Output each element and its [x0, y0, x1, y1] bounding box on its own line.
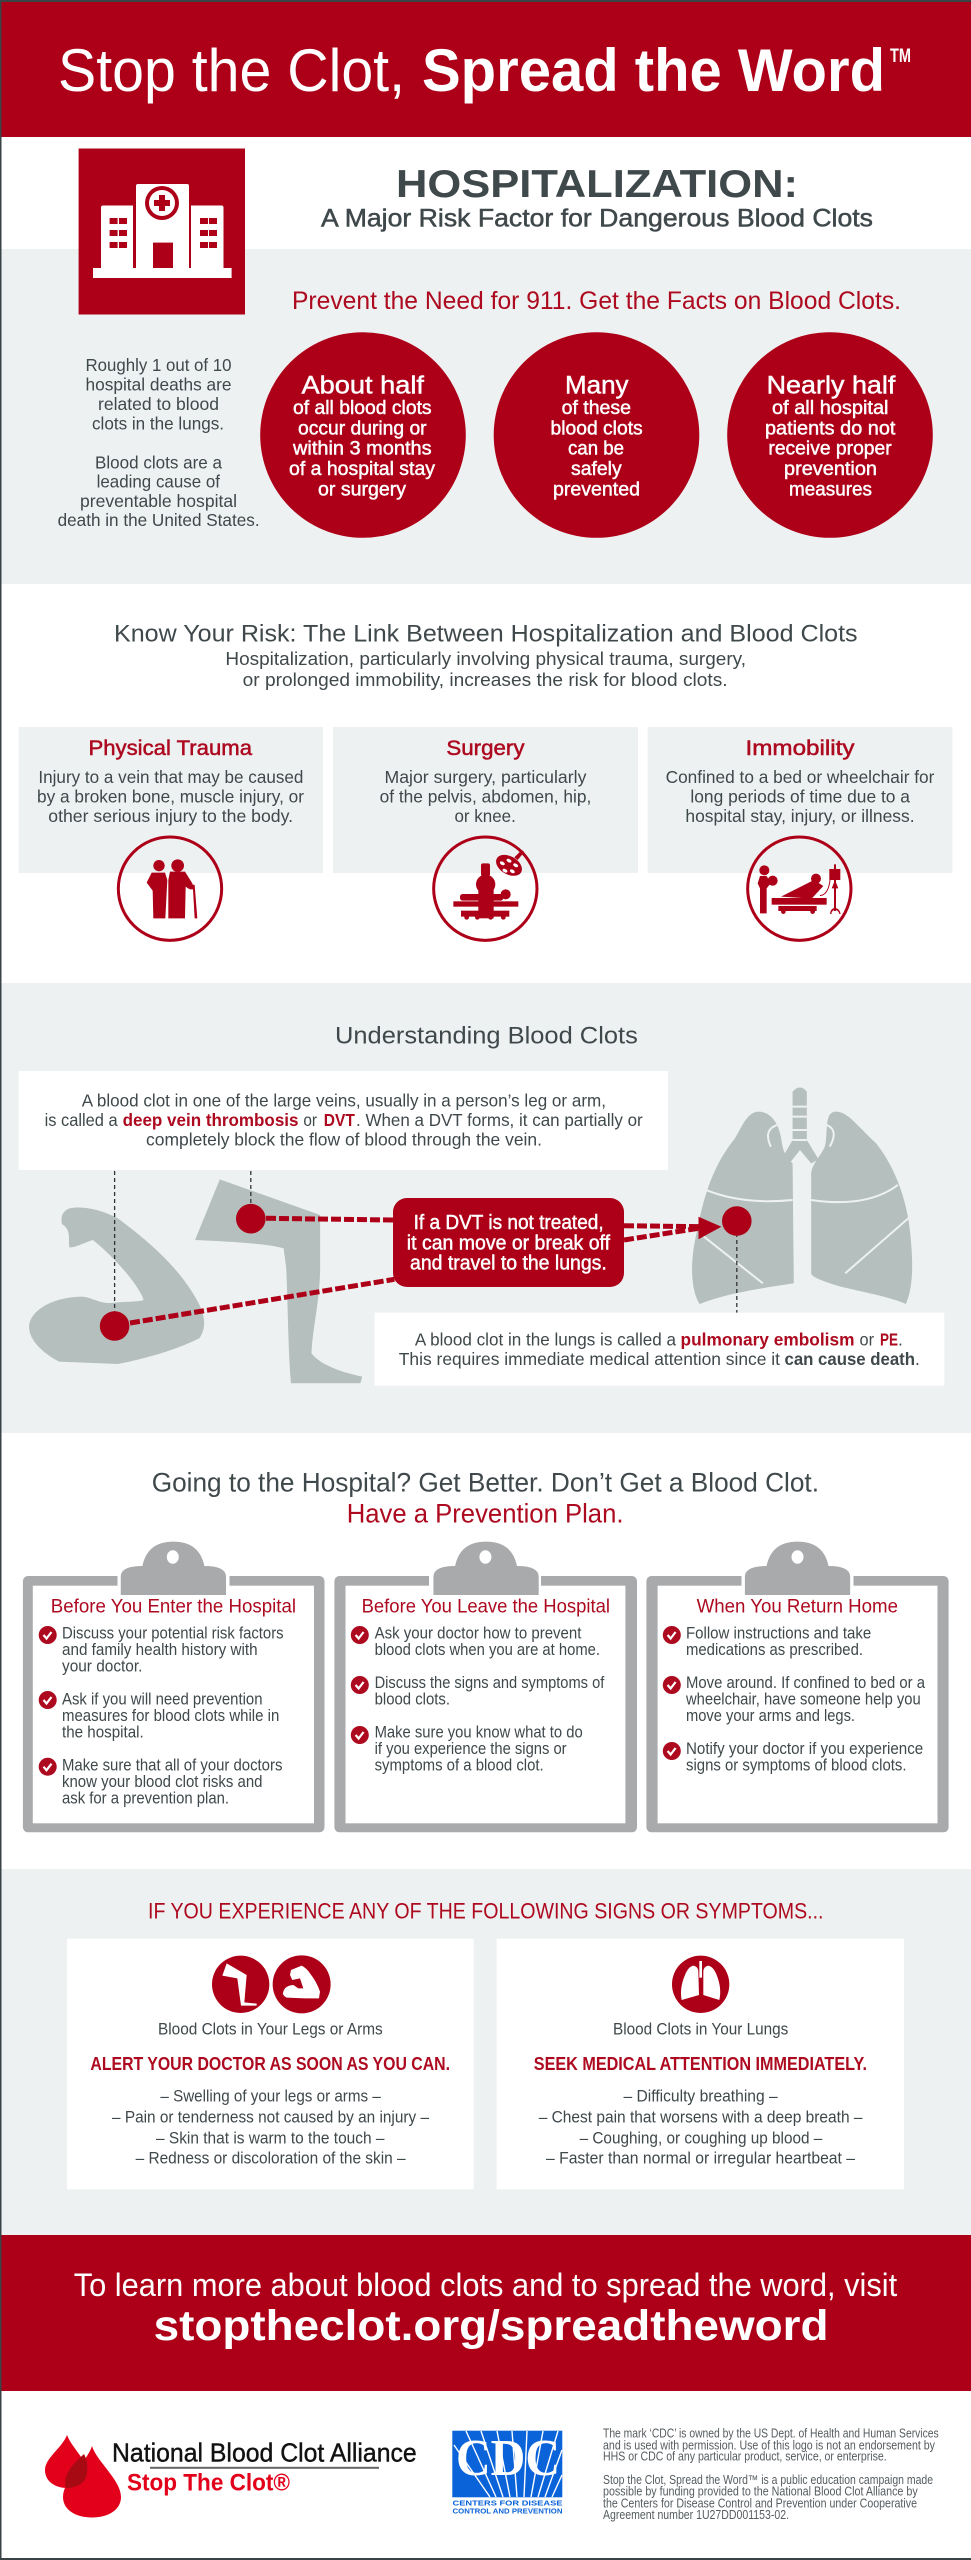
panel: clots in legs or arms: – Redness or discoloration of the skin – [136, 2148, 406, 2167]
checklist: Ask if you will need prevention [62, 1690, 262, 1708]
callout: pulmonary embolism: . [915, 1349, 920, 1369]
stat circle: nearly half: of all hospital [772, 398, 888, 419]
panel: clots in lungs: – Coughing, or coughing up blood – [580, 2128, 823, 2147]
panel: clots in lungs: – Difficulty breathing – [624, 2087, 778, 2106]
stat circle: nearly half [727, 332, 933, 538]
title: Spread the Word [422, 37, 885, 104]
callout: deep vein thrombosis [19, 1071, 668, 1170]
callout: pulmonary embolism: A blood clot in the lungs is called a [415, 1329, 676, 1349]
marker: clot in arm [100, 1311, 129, 1341]
callout: deep vein thrombosis: or [303, 1110, 317, 1130]
callout: deep vein thrombosis: A blood clot in one of the large veins, usually in a person’s leg or arm, [82, 1091, 606, 1111]
text block: disclaimer: possible by funding provided to the National Blood Clot Alliance by [603, 2485, 918, 2499]
panel: surgery: or knee. [454, 806, 516, 826]
callout: pulmonary embolism [375, 1313, 944, 1386]
arrow: leg and arm clots to callout [130, 1218, 394, 1323]
panel: clots in legs or arms: ALERT YOUR DOCTOR AS SOON AS YOU CAN. [90, 2053, 450, 2074]
icon: surgeon and operating table [434, 837, 537, 940]
icon: patient in hospital bed [748, 837, 851, 940]
text block: hospital death facts: Blood clots are a [95, 452, 222, 472]
logo: national blood clot alliance [45, 2435, 417, 2518]
callout: pulmonary embolism: PE [880, 1329, 898, 1349]
text block: hospital death facts: hospital deaths are [86, 374, 232, 394]
stat circle: many: safely [571, 459, 622, 480]
checklist: if you experience the signs or [375, 1740, 567, 1758]
panel: before you leave the hospital clipboard: Before You Leave the Hospital [362, 1595, 610, 1617]
title: TM [890, 46, 911, 67]
call to action banner: To learn more about blood clots and to spread the word, visit [74, 2267, 897, 2303]
checklist: move your arms and legs. [686, 1707, 855, 1725]
stat circle: many: blood clots [550, 418, 643, 439]
panel: clots in lungs [497, 1939, 904, 2189]
checklist: measures for blood clots while in [62, 1707, 279, 1725]
subheading: prevent the need for 911: Prevent the Need for 911. Get the Facts on Blood Clots. [292, 287, 901, 315]
heading: understanding blood clots: Understanding Blood Clots [335, 1022, 638, 1049]
checklist: the hospital. [62, 1724, 144, 1742]
arrow: callout to lung [624, 1217, 721, 1240]
stat circle: nearly half: Nearly half [767, 371, 895, 399]
checklist: symptoms of a blood clot. [375, 1757, 544, 1775]
heading: know your risk [114, 621, 858, 690]
text block: hospital death facts: Roughly 1 out of 10 [86, 355, 232, 375]
panel: clots in legs or arms: Blood Clots in Your Legs or Arms [158, 2021, 383, 2039]
heading: hospitalization [321, 163, 873, 232]
heading: hospitalization: HOSPITALIZATION: [396, 163, 798, 206]
panel: clots in lungs: Blood Clots in Your Lungs [613, 2021, 788, 2039]
panel: surgery: Major surgery, particularly [384, 767, 587, 787]
checklist: Discuss the signs and symptoms of [375, 1674, 605, 1692]
panel: physical trauma: other serious injury to the body. [48, 806, 293, 826]
stat circle: about half [260, 332, 466, 538]
title: Stop the Clot, [58, 37, 405, 104]
heading: know your risk: or prolonged immobility, increases the risk for blood clots. [243, 670, 728, 690]
panel: clots in legs or arms: – Swelling of your legs or arms – [160, 2087, 381, 2106]
call to action banner [0, 2235, 971, 2391]
callout: pulmonary embolism: can cause death [784, 1349, 915, 1369]
logo: national blood clot alliance: Stop The Clot® [127, 2470, 290, 2497]
callout: pulmonary embolism: . [898, 1329, 903, 1349]
checklist: Follow instructions and take [686, 1624, 871, 1642]
panel: physical trauma [19, 727, 323, 940]
panel: physical trauma: Injury to a vein that may be caused [38, 767, 303, 787]
callout: pulmonary embolism: or [860, 1329, 874, 1349]
icon: elderly people [118, 837, 222, 940]
checklist: Make sure that all of your doctors [62, 1757, 282, 1775]
stat circle: about half: occur during or [298, 418, 427, 439]
checklist: blood clots. [375, 1690, 450, 1708]
illustration: lungs [692, 1087, 912, 1304]
callout: deep vein thrombosis: DVT [324, 1110, 355, 1130]
checklist: Make sure you know what to do [375, 1724, 583, 1742]
stat circle: many: can be [568, 439, 624, 460]
checklist: Move around. If confined to bed or a [686, 1674, 926, 1692]
panel: before you leave the hospital clipboard [334, 1542, 637, 1832]
callout: deep vein thrombosis: completely block the flow of blood through the vein. [146, 1129, 542, 1149]
title [58, 37, 911, 104]
checklist: and family health history with [62, 1641, 258, 1659]
panel: surgery: of the pelvis, abdomen, hip, [380, 787, 591, 807]
heading: hospitalization: A Major Risk Factor for Dangerous Blood Clots [321, 204, 873, 232]
panel: clots in legs or arms: – Pain or tenderness not caused by an injury – [112, 2107, 429, 2126]
text block: disclaimer: the Centers for Disease Control and Prevention under Cooperative [603, 2496, 917, 2510]
checklist: medications as prescribed. [686, 1641, 863, 1659]
icon: hospital [79, 148, 245, 314]
panel: clots in legs or arms [67, 1939, 474, 2189]
illustration: leg [195, 1179, 362, 1383]
callout: pulmonary embolism: This requires immediate medical attention since it [399, 1349, 780, 1369]
stat circle: about half: or surgery [318, 480, 407, 501]
stat circle: about half: within 3 months [292, 439, 432, 460]
checklist [663, 1624, 926, 1775]
text block: disclaimer: HHS or CDC of any particular product, service, or enterprise. [603, 2450, 887, 2464]
panel: clots in legs or arms: – Skin that is warm to the touch – [156, 2128, 385, 2147]
callout: if a DVT is not treated: it can move or break off [407, 1232, 610, 1254]
heading: know your risk: Hospitalization, particularly involving physical trauma, surgery, [225, 649, 746, 669]
heading: prevention plan: Going to the Hospital? Get Better. Don’t Get a Blood Clot. [152, 1468, 819, 1498]
logo: CDC: CDC [456, 2430, 560, 2487]
heading: signs or symptoms: IF YOU EXPERIENCE ANY OF THE FOLLOWING SIGNS OR SYMPTOMS... [148, 1898, 824, 1923]
logo: CDC: CONTROL AND PREVENTION [452, 2506, 562, 2516]
panel: before you enter the hospital clipboard: Before You Enter the Hospital [51, 1595, 296, 1617]
checklist: blood clots when you are at home. [375, 1641, 600, 1659]
stat circle: nearly half: patients do not [765, 418, 896, 439]
panel: immobility: long periods of time due to a [690, 787, 910, 807]
icon: leg and arm [212, 1955, 331, 2013]
panel: when you return home clipboard: When You Return Home [697, 1595, 898, 1617]
stat circle: nearly half: measures [789, 480, 872, 501]
callout: if a DVT is not treated: If a DVT is not treated, [414, 1212, 604, 1234]
logo: national blood clot alliance: National Blood Clot Alliance [112, 2438, 417, 2468]
icon: lungs [672, 1956, 729, 2013]
logo: CDC: CENTERS FOR DISEASE [452, 2499, 562, 2508]
panel: immobility: Immobility [746, 737, 855, 760]
panel: immobility: Confined to a bed or wheelchair for [666, 767, 935, 787]
panel: surgery: Surgery [446, 737, 525, 760]
heading: know your risk: Know Your Risk: The Link Between Hospitalization and Blood Clots [114, 621, 858, 648]
stat circle: nearly half: receive proper [768, 439, 892, 460]
callout: deep vein thrombosis: deep vein thrombosis [123, 1110, 299, 1130]
heading: prevention plan: Have a Prevention Plan. [347, 1498, 624, 1528]
checklist: Ask your doctor how to prevent [375, 1624, 582, 1642]
stat circle: about half: of all blood clots [293, 398, 432, 419]
call to action banner: stoptheclot.org/spreadtheword [154, 2302, 829, 2350]
text block: hospital death facts: preventable hospital [80, 491, 237, 511]
panel: immobility: hospital stay, injury, or illness. [685, 806, 915, 826]
checklist: signs or symptoms of blood clots. [686, 1757, 906, 1775]
checklist: Notify your doctor if you experience [686, 1740, 923, 1758]
text block: disclaimer: Agreement number 1U27DD001153-02. [603, 2508, 789, 2522]
stat circle: about half: About half [302, 371, 424, 399]
stat circle: nearly half: prevention [784, 459, 877, 480]
panel: immobility [648, 727, 952, 940]
panel: clots in lungs: – Chest pain that worsens with a deep breath – [539, 2107, 863, 2126]
panel: when you return home clipboard [646, 1542, 949, 1832]
header banner [0, 2, 971, 137]
stat circle: many [494, 332, 699, 538]
logo: CDC [452, 2430, 562, 2516]
panel: surgery [333, 727, 638, 940]
text block: hospital death facts [58, 355, 260, 530]
checklist: Discuss your potential risk factors [62, 1624, 284, 1642]
checklist: wheelchair, have someone help you [685, 1690, 921, 1708]
callout: deep vein thrombosis: is called a [45, 1110, 118, 1130]
panel: clots in lungs: – Faster than normal or irregular heartbeat – [546, 2148, 855, 2167]
stat circle: many: prevented [553, 480, 640, 501]
text block: disclaimer [603, 2426, 939, 2522]
panel: physical trauma: Physical Trauma [88, 737, 252, 760]
callout: if a DVT is not treated: and travel to the lungs. [410, 1252, 607, 1274]
leader lines [115, 1171, 737, 1313]
text block: hospital death facts: leading cause of [97, 472, 220, 492]
stat circle: many: Many [565, 371, 629, 399]
text block: hospital death facts: related to blood [98, 394, 219, 414]
checklist [39, 1624, 284, 1807]
panel: clots in lungs: SEEK MEDICAL ATTENTION IMMEDIATELY. [534, 2053, 867, 2074]
callout: deep vein thrombosis: . When a DVT forms, it can partially or [356, 1110, 643, 1130]
text block: hospital death facts: clots in the lungs. [92, 413, 224, 433]
marker: clot in lung [722, 1206, 752, 1236]
callout: if a DVT is not treated [393, 1198, 624, 1287]
illustration: arm [29, 1207, 204, 1364]
panel: physical trauma: by a broken bone, muscle injury, or [37, 787, 304, 807]
checklist: your doctor. [62, 1658, 142, 1676]
panel: before you enter the hospital clipboard [23, 1542, 325, 1832]
stat circle: many: of these [562, 398, 631, 419]
text block: hospital death facts: death in the United States. [58, 510, 260, 530]
stat circle: about half: of a hospital stay [289, 459, 436, 480]
marker: clot in leg [236, 1204, 266, 1233]
checklist [351, 1624, 605, 1775]
callout: pulmonary embolism: pulmonary embolism [680, 1329, 854, 1349]
heading: prevention plan [152, 1468, 819, 1528]
checklist: know your blood clot risks and [62, 1773, 262, 1791]
checklist: ask for a prevention plan. [62, 1789, 229, 1807]
